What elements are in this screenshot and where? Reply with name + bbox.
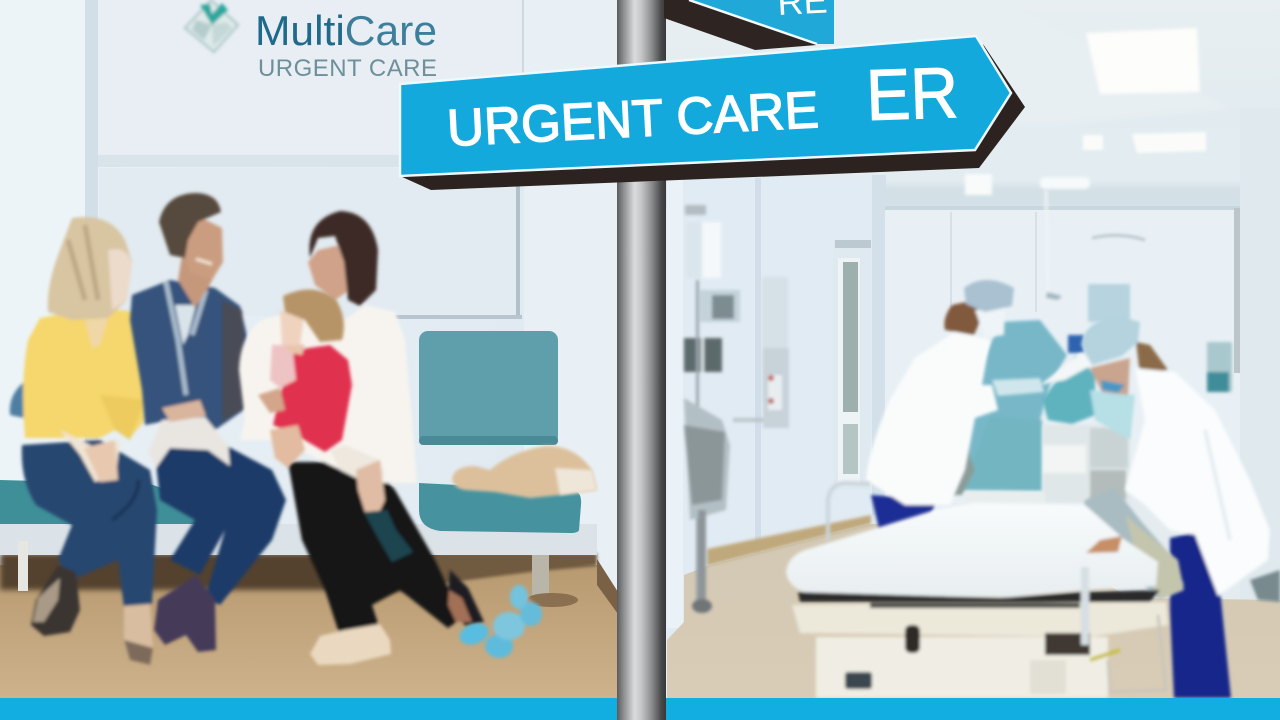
- sign label: URGENT CARE: URGENT CARE: [446, 81, 820, 158]
- person: child in red: [258, 289, 352, 468]
- floor: [667, 520, 1280, 698]
- bench seat and frame: [0, 331, 597, 607]
- door: [833, 240, 871, 490]
- person: nurse in white coat right: [1040, 316, 1270, 698]
- person: woman in white sweater: [239, 211, 484, 665]
- subtitle: URGENT CARE: [258, 55, 437, 82]
- patterned blanket: [1080, 488, 1184, 600]
- wordmark: MultiCare: [255, 7, 437, 54]
- icon: blue toy: [456, 585, 542, 658]
- bed base: [816, 637, 1108, 698]
- sign face: [400, 36, 1011, 176]
- wall equipment: [684, 190, 1232, 613]
- upper direction sign: [664, 0, 834, 50]
- person: woman in yellow: [10, 217, 157, 665]
- logo: MultiCare Urgent Care: [185, 0, 437, 82]
- ceiling: [660, 0, 1280, 210]
- sign label: ER: ER: [865, 53, 959, 136]
- mattress: [786, 503, 1158, 597]
- folded blanket on seat: [452, 446, 597, 498]
- ceiling lights: [965, 28, 1206, 195]
- hospital bed: [786, 483, 1184, 698]
- signpost pole: [617, 0, 666, 720]
- person: teal gowned clinician: [945, 320, 1067, 495]
- panel: urgent care waiting room photo: [0, 0, 618, 698]
- medical cart behind bed: [1043, 425, 1130, 503]
- bed side rail frame: [828, 483, 870, 540]
- corridor walls: [667, 108, 1280, 638]
- sign shadow side: [400, 44, 1025, 190]
- icon: MultiCare diamond mark: [185, 0, 238, 52]
- person: woman in navy sweater: [130, 193, 286, 652]
- waiting room wall: [0, 0, 618, 600]
- panel: emergency room photo: [660, 0, 1280, 698]
- floor: [0, 565, 618, 698]
- small floor item: [1250, 570, 1280, 602]
- person: nurse in white coat left: [866, 280, 1044, 533]
- footer band: [0, 698, 1280, 720]
- main direction sign: [400, 36, 1025, 190]
